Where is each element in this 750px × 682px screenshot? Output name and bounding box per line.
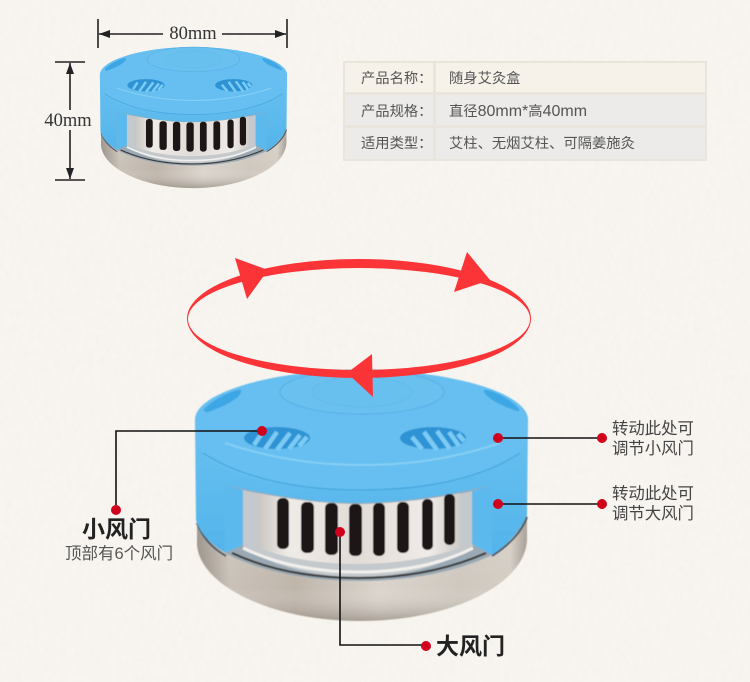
callout: small vent: 小风门	[82, 516, 151, 542]
specification table: 产品名称：	[361, 70, 432, 87]
callout: small vent: 顶部有6个风门	[65, 544, 173, 563]
specification table	[343, 61, 707, 161]
callout: rotate for large vent: 调节大风门	[612, 505, 694, 523]
callout: rotate for small vent: 调节小风门	[612, 440, 694, 458]
specification table: 产品规格：	[361, 103, 432, 120]
callout: small vent	[65, 426, 267, 563]
callout: rotate for large vent: 转动此处可	[612, 485, 694, 503]
callout: rotate for small vent: 转动此处可	[612, 420, 694, 438]
specification table: 直径80mm*高40mm	[449, 103, 587, 120]
specification table: 艾柱、无烟艾柱、可隔姜施灸	[449, 135, 635, 152]
callout: rotate for large vent	[493, 485, 694, 523]
callout: large vent	[335, 527, 505, 659]
width dimension: 80mm	[98, 19, 287, 48]
callout: large vent: 大风门	[436, 633, 505, 659]
specification table: 随身艾灸盒	[449, 70, 520, 87]
callout: rotate for small vent	[493, 420, 694, 458]
specification table: 适用类型：	[361, 135, 432, 152]
small product photo	[100, 47, 287, 188]
large product photo	[195, 370, 528, 621]
width dimension: 80mm: 80mm	[169, 24, 217, 44]
rotation ring with arrows	[187, 252, 531, 397]
height dimension: 40mm	[44, 62, 92, 180]
height dimension: 40mm: 40mm	[44, 111, 92, 131]
